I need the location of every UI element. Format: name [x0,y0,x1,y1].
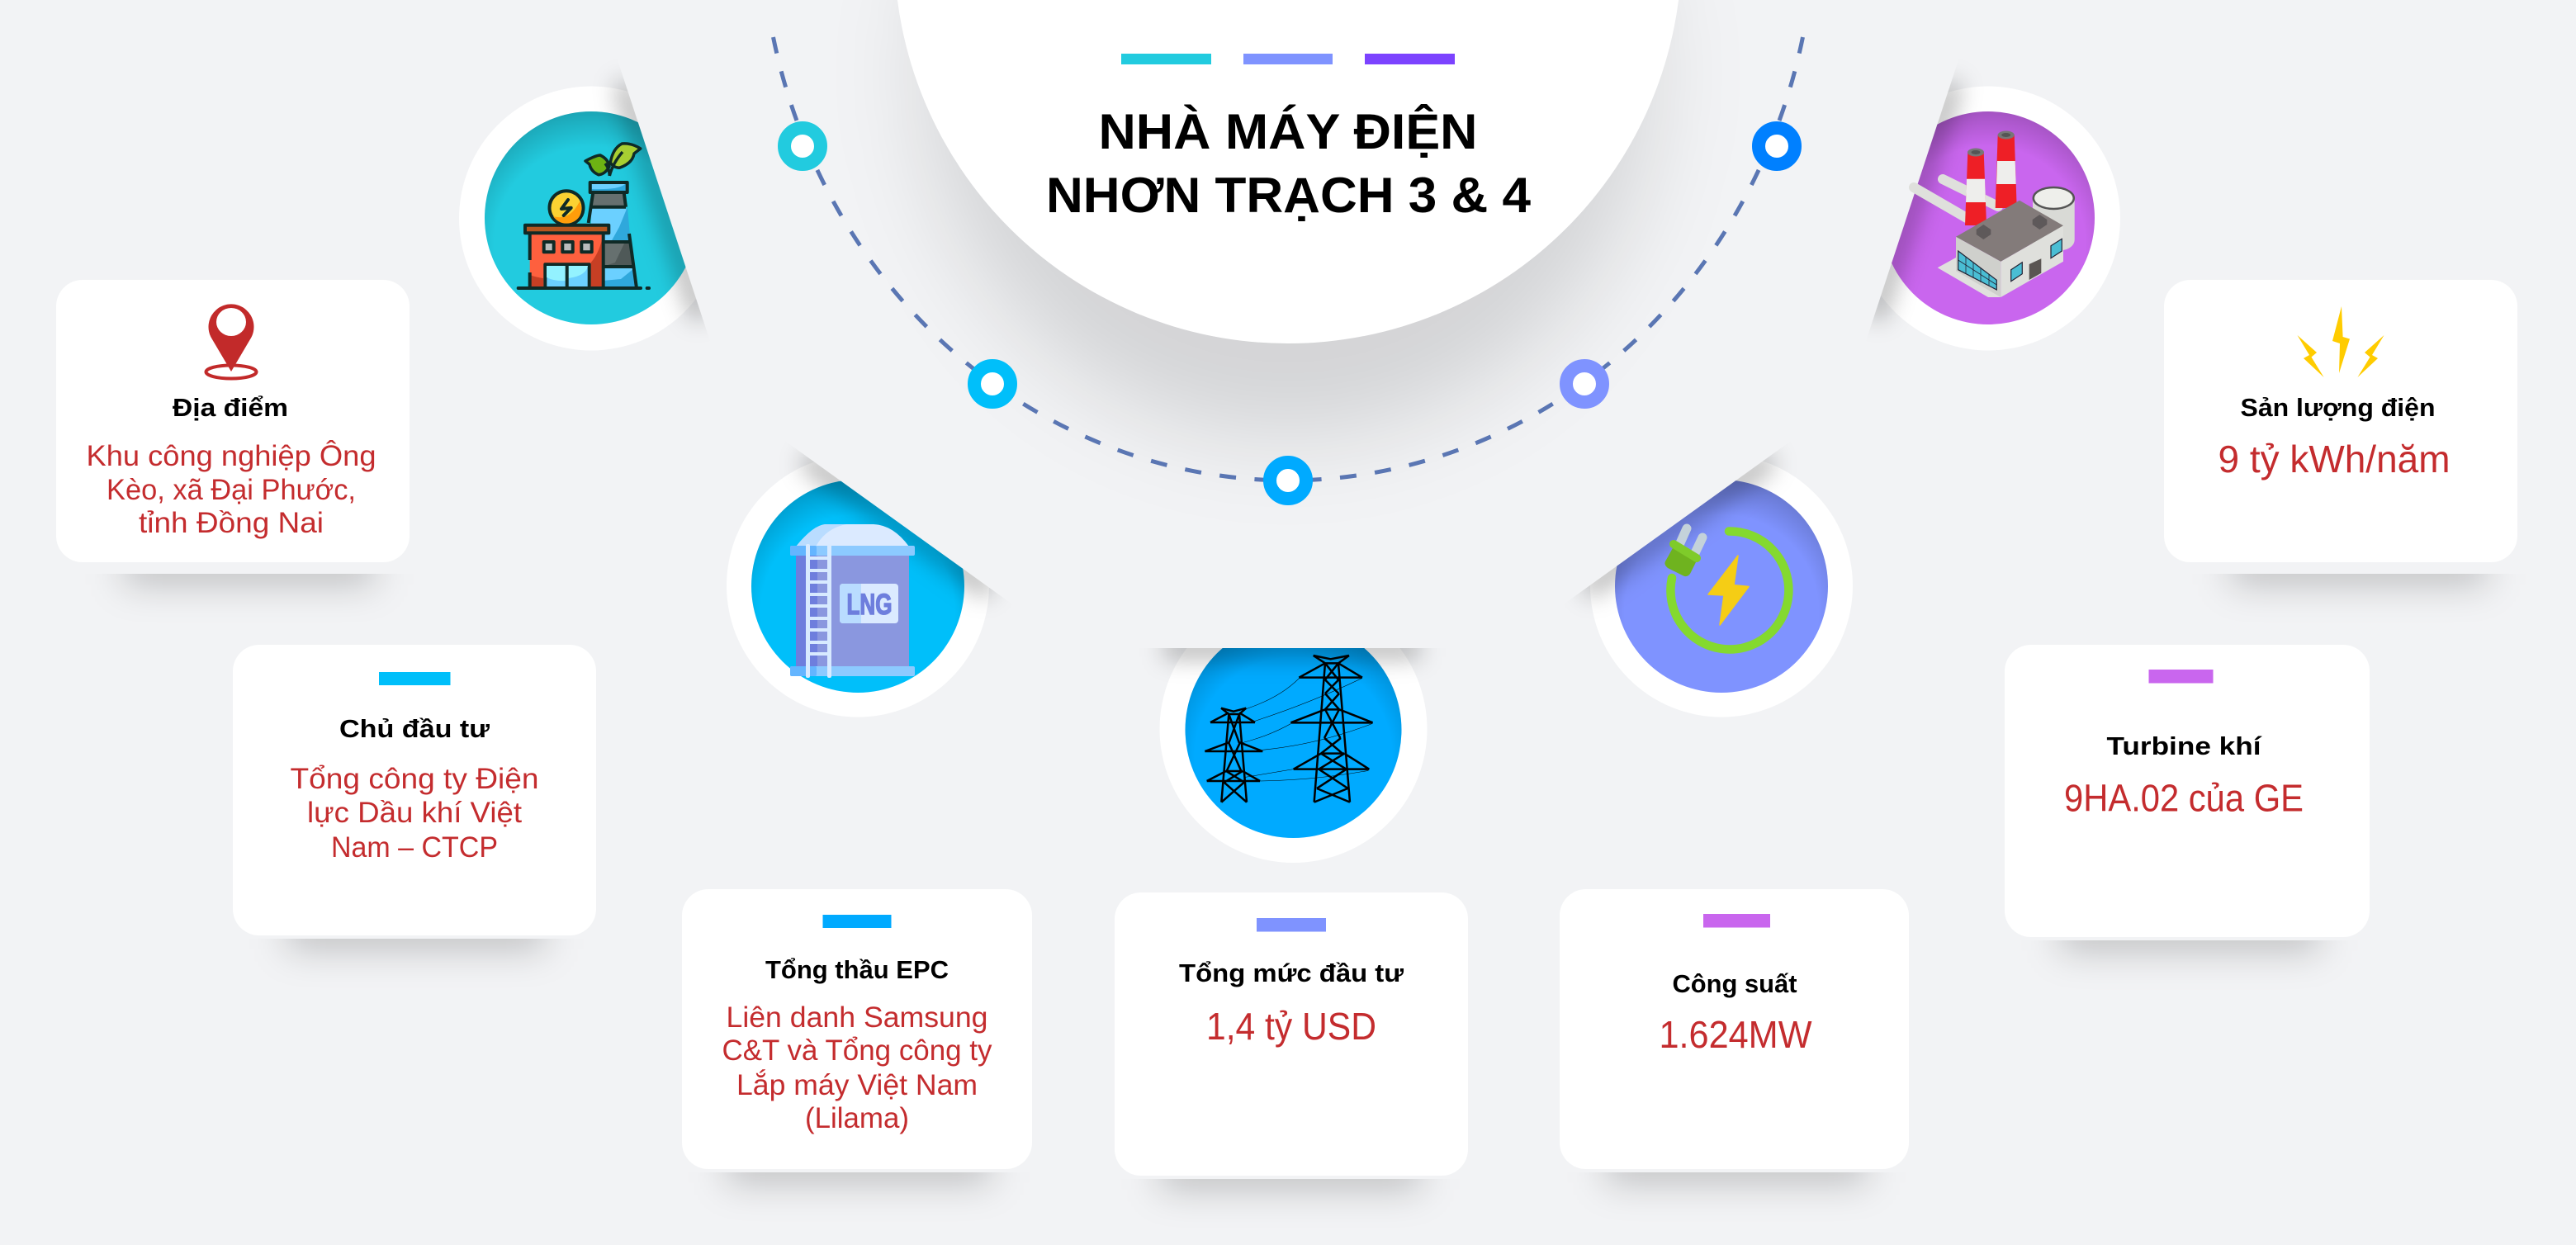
panel: Tổng mức đầu tư [1115,892,1468,1176]
icon disc: factory with leaves [459,86,723,350]
centre paper shape [598,0,1978,648]
value text [291,763,538,864]
panel: Chủ đầu tư [233,645,596,935]
heading: Tổng mức đầu tư [1179,959,1404,987]
panel: Địa điểm [56,280,410,562]
heading: Turbine khí [2107,731,2262,760]
heading: Chủ đầu tư [339,714,490,743]
title [1046,104,1532,223]
heading: Tổng thầu EPC [765,955,949,984]
icon: LNG tank [790,524,915,678]
icon: lightning bolts [2297,306,2384,377]
icon: factory with leaves [517,144,651,290]
accent bar [1257,918,1326,931]
value text: 1,4 tỷ USD [1206,1005,1376,1048]
value text [722,1001,992,1134]
value text: 9HA.02 của GE [2064,776,2304,819]
value text [86,440,376,539]
soft shadow of header circle [925,0,1651,438]
value text: 9 tỷ kWh/năm [2218,438,2451,480]
value text: lực Dầu khí Việt [307,797,522,829]
accent bar [822,915,892,928]
icon disc: isometric plant [1856,86,2120,350]
icon: location pin [206,304,256,378]
card shadows [124,545,2487,1190]
timeline dots [784,128,1795,499]
value text: C&T và Tổng công ty [722,1034,992,1067]
panel: Công suất [1560,889,1909,1169]
icon disc: power towers [1159,595,1427,863]
title: NHÀ MÁY ĐIỆN [1098,104,1478,159]
icon disc: LNG tank [727,454,989,717]
value text: Tổng công ty Điện [291,763,538,795]
panel: Tổng thầu EPC [682,889,1032,1169]
heading: Địa điểm [173,393,288,422]
edge shadows cast on the icon discs [623,83,1953,648]
icon: power transmission towers [1205,656,1373,802]
panel: Turbine khí [2005,645,2370,937]
panel: Sản lượng điện [2164,280,2517,562]
accent bar [2148,670,2213,684]
heading: Công suất [1673,969,1797,998]
dashed timeline arc [773,37,1803,480]
icon: isometric power plant [1914,130,2075,297]
title: NHƠN TRẠCH 3 & 4 [1046,168,1532,223]
header circle [894,0,1682,343]
title accent bars [1121,54,1455,64]
value text: 1.624MW [1660,1013,1812,1056]
icon disc: plug [1590,454,1853,717]
icon: plug with charging ring [1664,528,1788,649]
icon: LNG tank: LNG [847,589,892,621]
value text: (Lilama) [805,1102,909,1134]
value text: tỉnh Đồng Nai [139,507,324,539]
value text: Lắp máy Việt Nam [736,1069,978,1101]
accent bar [379,672,451,685]
accent bar [1703,914,1770,928]
value text: Nam – CTCP [331,831,498,864]
value text: Liên danh Samsung [727,1001,987,1034]
value text: Kèo, xã Đại Phước, [107,474,356,506]
heading: Sản lượng điện [2241,393,2436,422]
value text: Khu công nghiệp Ông [86,440,376,472]
